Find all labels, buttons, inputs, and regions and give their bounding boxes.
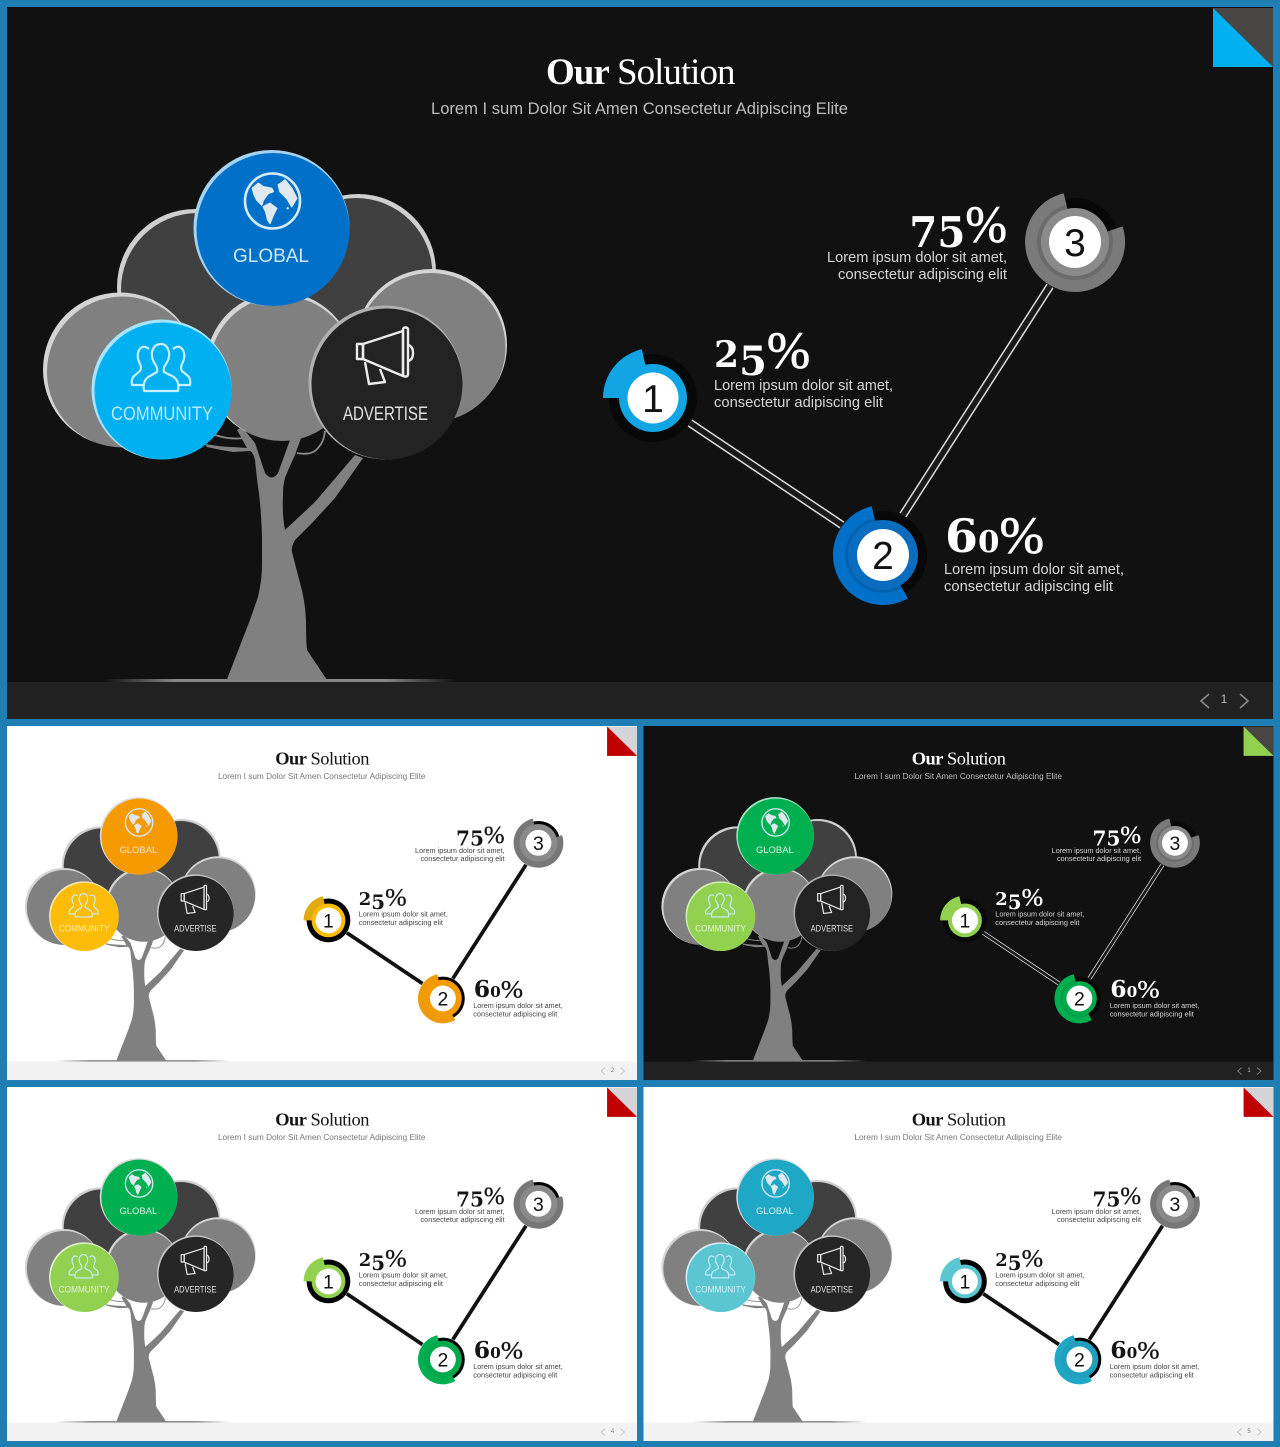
- subtitle: Lorem I sum Dolor Sit Amen Consectetur Adipiscing Elite: [854, 1132, 1062, 1142]
- stat: 25%: consectetur adipiscing elit: [995, 918, 1079, 927]
- connector: 2 to 3: [1089, 1226, 1162, 1340]
- stat: 60%: consectetur adipiscing elit: [473, 1370, 557, 1379]
- bubble: global: GLOBAL: [119, 845, 157, 856]
- stat: 60%: %: [999, 508, 1044, 565]
- bubble: community: COMMUNITY: [59, 1284, 110, 1295]
- stat: 25%: 2: [714, 334, 739, 376]
- bubble: global: GLOBAL: [233, 246, 309, 267]
- bubble: global: GLOBAL: [756, 1206, 794, 1217]
- stat: 75%: 75: [456, 826, 484, 850]
- stat: 25%: consectetur adipiscing elit: [359, 918, 443, 927]
- tree with grey canopy: [43, 194, 507, 682]
- node 2: [418, 1335, 465, 1384]
- slide 3: dark green variant: [644, 726, 1273, 1080]
- stat: 25%: [995, 1243, 1084, 1288]
- bubble: community: COMMUNITY: [695, 923, 747, 934]
- pagination: 1: [1247, 1068, 1251, 1074]
- bubble: advertise: [794, 1235, 870, 1312]
- node 1: [304, 1257, 350, 1303]
- stat: 60%: [944, 508, 1124, 595]
- stat: 75%: [827, 197, 1007, 283]
- stat: 25%: [714, 323, 893, 411]
- pagination: [601, 1068, 625, 1075]
- stat: 60%: Lorem ipsum dolor sit amet,: [473, 1001, 563, 1010]
- node 1: 1: [642, 378, 664, 421]
- stat: 60%: [473, 1336, 563, 1379]
- tree with grey canopy: [661, 819, 892, 1062]
- pagination: 1: [1221, 692, 1228, 706]
- node 2: [1054, 1335, 1101, 1384]
- stat: 60%: %: [501, 975, 523, 1003]
- node 3: 3: [533, 1194, 544, 1216]
- bubble: community: COMMUNITY: [695, 1284, 747, 1295]
- stat: 75%: [415, 820, 505, 863]
- node 3: [514, 1180, 563, 1229]
- connector: 1 to 2: [983, 1294, 1059, 1345]
- stat: 25%: 5: [1008, 890, 1022, 914]
- connector: 2 to 3: [1089, 865, 1162, 979]
- node 2: [1054, 974, 1101, 1023]
- stat: 75%: Lorem ipsum dolor sit amet,: [1052, 1207, 1141, 1216]
- stat: 60%: 60: [1110, 1337, 1137, 1364]
- slide background: [644, 726, 1273, 1080]
- connector: 1 to 2: [347, 933, 422, 984]
- stat: 25%: consectetur adipiscing elit: [359, 1279, 443, 1288]
- stat: 25%: 5: [371, 890, 385, 914]
- pagination: 4: [611, 1429, 615, 1435]
- stat: 25%: 5: [371, 1251, 385, 1275]
- stat: 25%: 5: [739, 338, 767, 385]
- subtitle: Lorem I sum Dolor Sit Amen Consectetur Adipiscing Elite: [854, 771, 1062, 781]
- bubble: community: [686, 1242, 755, 1312]
- node 2: 2: [438, 1349, 448, 1371]
- corner fold: [1244, 1087, 1273, 1117]
- stat: 75%: consectetur adipiscing elit: [421, 1215, 505, 1224]
- footer bar: [7, 1423, 637, 1441]
- node 1: 1: [323, 910, 334, 932]
- node 2: 2: [1074, 1349, 1085, 1371]
- stat: 60%: [1110, 975, 1199, 1018]
- stat: 75%: %: [965, 197, 1007, 254]
- bubble: global: [736, 1158, 814, 1236]
- node 3: 3: [1064, 222, 1086, 265]
- stat: 75%: Lorem ipsum dolor sit amet,: [1052, 846, 1141, 855]
- stat: 25%: Lorem ipsum dolor sit amet,: [995, 1270, 1084, 1279]
- pagination: [1201, 692, 1248, 708]
- stat: 60%: Lorem ipsum dolor sit amet,: [473, 1362, 563, 1371]
- stat: 60%: 60: [1110, 976, 1137, 1003]
- node 1: [940, 896, 987, 942]
- stat: 25%: 2: [359, 1250, 371, 1271]
- node 2: [418, 974, 465, 1023]
- tree with grey canopy: [25, 819, 256, 1062]
- stat: 75%: %: [484, 1181, 505, 1210]
- stat: 75%: consectetur adipiscing elit: [838, 267, 1007, 283]
- stat: 60%: Lorem ipsum dolor sit amet,: [944, 562, 1124, 578]
- slide 4: white green variant: [7, 1087, 637, 1441]
- stat: 60%: 60: [945, 510, 999, 564]
- stat: 75%: %: [1120, 820, 1141, 849]
- stat: 25%: %: [1022, 882, 1043, 911]
- bubble: advertise: ADVERTISE: [811, 923, 853, 934]
- connector: 1 to 2: [983, 933, 1059, 984]
- footer bar: [7, 682, 1273, 719]
- stat: 75%: [1052, 820, 1141, 863]
- stat: 25%: Lorem ipsum dolor sit amet,: [359, 1270, 448, 1279]
- slide 1: large dark blue variant: [7, 7, 1273, 719]
- stat: 25%: Lorem ipsum dolor sit amet,: [714, 378, 893, 394]
- node 1: [304, 896, 350, 942]
- slide 5: white teal variant: [644, 1087, 1273, 1441]
- stat: 75%: Lorem ipsum dolor sit amet,: [415, 1207, 505, 1216]
- subtitle: Lorem I sum Dolor Sit Amen Consectetur Adipiscing Elite: [218, 771, 426, 781]
- connector: 2 to 3: [903, 286, 1050, 515]
- title: Our Solution: [275, 1109, 369, 1129]
- stat: 75%: %: [1120, 1181, 1141, 1210]
- stat: 25%: %: [385, 1243, 407, 1272]
- stat: 75%: 75: [1092, 1187, 1120, 1211]
- node 1: 1: [960, 1271, 970, 1293]
- pagination: 5: [1247, 1429, 1251, 1435]
- node 3: [1025, 193, 1125, 292]
- stat: 25%: [995, 882, 1084, 927]
- stat: 25%: %: [385, 882, 407, 911]
- connector: 2 to 3: [453, 1226, 526, 1340]
- title: Our Solution: [912, 1109, 1006, 1129]
- bubble: advertise: [157, 1235, 234, 1312]
- node 2: 2: [1074, 988, 1085, 1010]
- pagination: 2: [611, 1068, 615, 1074]
- stat: 25%: 2: [359, 889, 371, 910]
- bubble: global: [100, 1158, 177, 1236]
- stat: 25%: 2: [995, 1250, 1008, 1271]
- connector: 2 to 3: [453, 865, 526, 979]
- bubble: advertise: [794, 874, 870, 951]
- pagination: [601, 1429, 625, 1436]
- stat: 60%: 60: [474, 1337, 501, 1364]
- title: Our Solution: [912, 748, 1006, 768]
- bubble: advertise: [308, 306, 462, 460]
- node 3: 3: [533, 833, 544, 855]
- bubble: global: GLOBAL: [756, 845, 794, 856]
- stat: 60%: Lorem ipsum dolor sit amet,: [1110, 1362, 1199, 1371]
- stat: 75%: [1052, 1181, 1141, 1224]
- bubble: advertise: ADVERTISE: [174, 923, 216, 934]
- stat: 75%: %: [484, 820, 505, 849]
- footer bar: [644, 1062, 1273, 1080]
- subtitle: Lorem I sum Dolor Sit Amen Consectetur Adipiscing Elite: [431, 99, 848, 118]
- stat: 25%: Lorem ipsum dolor sit amet,: [995, 909, 1084, 918]
- bubble: community: COMMUNITY: [59, 923, 110, 934]
- tree with grey canopy: [25, 1180, 256, 1423]
- bubble: advertise: ADVERTISE: [811, 1284, 853, 1295]
- pagination: [1238, 1429, 1261, 1436]
- stat: 75%: consectetur adipiscing elit: [1057, 854, 1141, 863]
- node 3: [1150, 819, 1200, 868]
- stat: 75%: [415, 1181, 505, 1224]
- corner fold: [607, 726, 637, 756]
- stat: 60%: 60: [474, 976, 501, 1003]
- tree with grey canopy: [661, 1180, 892, 1423]
- node 1: [940, 1257, 987, 1303]
- stat: 75%: 75: [456, 1187, 484, 1211]
- bubble: community: [686, 881, 755, 951]
- stat: 60%: %: [501, 1336, 523, 1364]
- stat: 60%: consectetur adipiscing elit: [1110, 1009, 1194, 1018]
- node 3: 3: [1170, 833, 1180, 855]
- stat: 75%: consectetur adipiscing elit: [421, 854, 505, 863]
- stat: 75%: 75: [1092, 826, 1120, 850]
- stat: 60%: consectetur adipiscing elit: [473, 1009, 557, 1018]
- bubble: advertise: [157, 874, 234, 951]
- stat: 75%: Lorem ipsum dolor sit amet,: [415, 846, 505, 855]
- stat: 75%: Lorem ipsum dolor sit amet,: [827, 250, 1007, 266]
- stat: 25%: consectetur adipiscing elit: [714, 395, 883, 411]
- stat: 60%: %: [1137, 1336, 1160, 1364]
- corner fold: [1213, 8, 1273, 67]
- title: Our Solution: [275, 748, 369, 768]
- node 1: [603, 349, 697, 442]
- corner fold: [1244, 726, 1273, 756]
- bubble: advertise: ADVERTISE: [343, 404, 428, 425]
- bubble: global: [736, 797, 814, 875]
- footer bar: [644, 1423, 1273, 1441]
- connector: 1 to 2: [347, 1294, 422, 1345]
- slide background: [7, 1087, 637, 1441]
- stat: 25%: %: [767, 323, 810, 380]
- stat: 60%: Lorem ipsum dolor sit amet,: [1110, 1001, 1199, 1010]
- bubble: community: [49, 881, 119, 951]
- node 2: [833, 506, 927, 605]
- slide background: [7, 7, 1273, 719]
- stat: 25%: Lorem ipsum dolor sit amet,: [359, 909, 448, 918]
- slide 2: white orange variant: [7, 726, 637, 1080]
- stat: 75%: consectetur adipiscing elit: [1057, 1215, 1141, 1224]
- bubble: community: COMMUNITY: [111, 404, 213, 425]
- bubble: community: [49, 1242, 119, 1312]
- stat: 25%: 2: [995, 889, 1008, 910]
- stat: 25%: [359, 1243, 448, 1288]
- bubble: advertise: ADVERTISE: [174, 1284, 216, 1295]
- pagination: [1238, 1068, 1261, 1075]
- corner fold: [607, 1087, 637, 1117]
- node 1: 1: [960, 910, 970, 932]
- bubble: global: [100, 797, 177, 875]
- stat: 25%: 5: [1008, 1251, 1022, 1275]
- title: Our Solution: [546, 52, 735, 93]
- node 2: 2: [872, 535, 894, 578]
- connector: 1 to 2: [690, 423, 842, 525]
- node 3: [514, 819, 563, 868]
- stat: 25%: [359, 882, 448, 927]
- stat: 60%: [1110, 1336, 1199, 1379]
- subtitle: Lorem I sum Dolor Sit Amen Consectetur Adipiscing Elite: [218, 1132, 426, 1142]
- node 3: [1150, 1180, 1200, 1229]
- stat: 25%: consectetur adipiscing elit: [995, 1279, 1079, 1288]
- node 1: 1: [323, 1271, 334, 1293]
- stat: 75%: 75: [909, 207, 965, 257]
- footer bar: [7, 1062, 637, 1080]
- stat: 60%: consectetur adipiscing elit: [944, 579, 1113, 595]
- slide background: [644, 1087, 1273, 1441]
- stat: 60%: %: [1137, 975, 1160, 1003]
- bubble: community: [92, 320, 232, 460]
- bubble: global: GLOBAL: [119, 1206, 157, 1217]
- node 3: 3: [1170, 1194, 1180, 1216]
- stat: 60%: [473, 975, 563, 1018]
- stat: 25%: %: [1022, 1243, 1043, 1272]
- bubble: global: [194, 150, 350, 306]
- stat: 60%: consectetur adipiscing elit: [1110, 1370, 1194, 1379]
- slide background: [7, 726, 637, 1080]
- node 2: 2: [438, 988, 448, 1010]
